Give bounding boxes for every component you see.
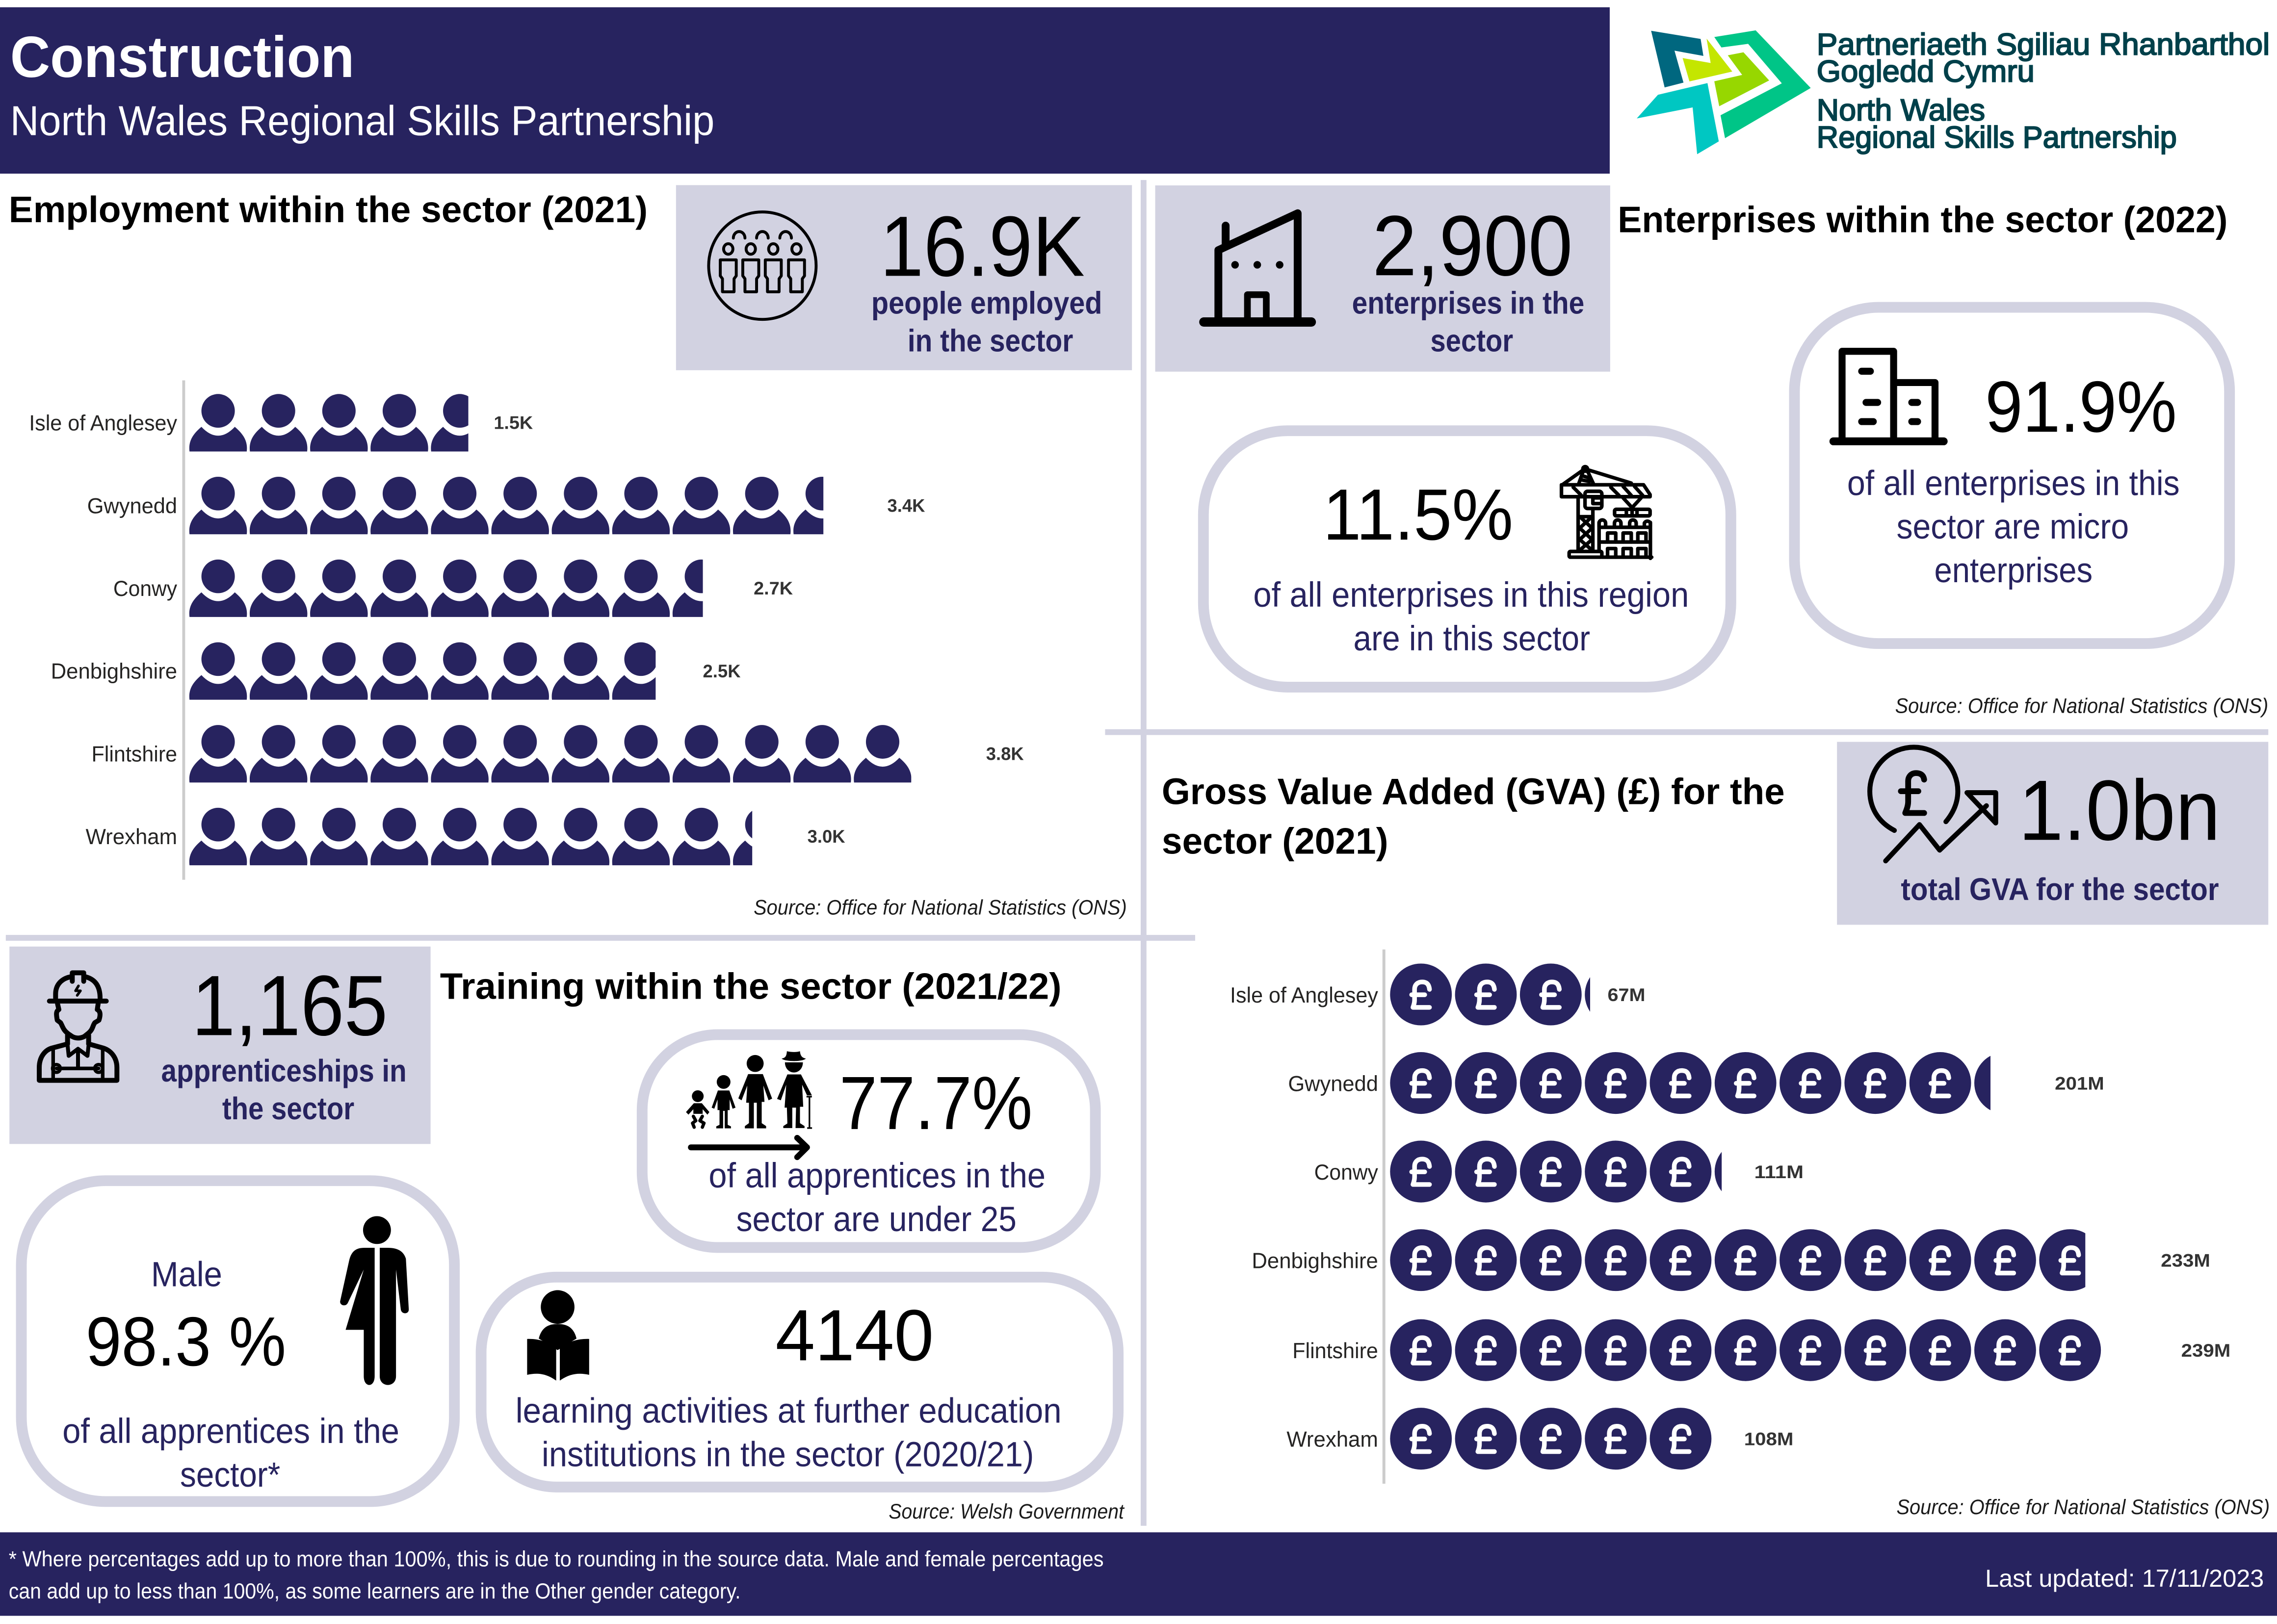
figure: 1,165: 1,165 [192,958,388,1054]
stat card: apprenticeships: the sector [222,1091,354,1126]
row: Conwy: 2.7K [754,578,793,598]
header banner [0,7,1610,174]
callout: micro enterprises: enterprises [1934,551,2093,590]
row: Conwy: Conwy [1314,1160,1379,1185]
icon: construction worker [39,973,117,1081]
figure: 1.0bn: 1.0bn [2018,763,2221,858]
callout: share of enterprises [1204,431,1731,687]
logo: North Wales [1817,94,1985,128]
footnote: can add up to less than 100%, as some learners are in the Other gender category. [9,1579,741,1603]
row: Flintshire: Flintshire [91,742,177,766]
stat card: people employed [676,185,1132,370]
row: Flintshire [1292,1319,2230,1381]
figure: 16.9K: 16.9K [880,199,1085,294]
stat card: enterprises [1155,185,1610,372]
heading: training: Training within the sector (2021/22) [440,965,1062,1006]
pictogram chart: GVA by county [1230,950,2230,1484]
stat card: people employed: in the sector [908,323,1073,358]
text: micro enterprises: of all enterprises in this [1847,464,2180,503]
row: Denbighshire [51,642,741,700]
footnote: * Where percentages add up to more than 100%, this is due to rounding in the source data. Male and female percentages [9,1547,1103,1572]
row: Denbighshire: Denbighshire [51,660,177,684]
row: Wrexham [1286,1408,1793,1469]
source: training: Source: Welsh Government [889,1500,1125,1523]
icon: gender figure [340,1216,409,1385]
callout: learning activities [481,1277,1118,1487]
row: Gwynedd [87,477,925,534]
row: Wrexham: Wrexham [1286,1427,1378,1451]
row: Isle of Anglesey: 1.5K [494,413,533,433]
icon: family ages with arrow [686,1051,812,1157]
row: Wrexham [86,808,845,865]
heading: GVA [1162,771,1785,861]
icon: crane and building [1562,466,1652,558]
row: Gwynedd: Gwynedd [1288,1072,1378,1096]
logo: Partneriaeth Sgiliau Rhanbarthol [1817,28,2270,62]
row: Conwy: 111M [1754,1162,1804,1182]
row: Flintshire: Flintshire [1292,1339,1378,1363]
row: Wrexham: 108M [1744,1429,1793,1449]
row: Denbighshire: 2.5K [703,661,741,681]
text: learning activities: learning activities at further education [516,1392,1062,1431]
stat card: total GVA [1837,742,2268,925]
panel: enterprises [1155,185,2268,718]
row: Gwynedd: 201M [2055,1073,2104,1093]
last updated: Last updated: 17/11/2023 [1985,1564,2264,1592]
figure: 91.9%: 91.9% [1985,366,2177,447]
callout: learning activities: institutions in the sector (2020/21) [542,1435,1034,1474]
heading: enterprises: Enterprises within the sector (2022) [1618,199,2227,240]
row: Flintshire [91,725,1024,782]
row: Denbighshire: Denbighshire [1252,1249,1378,1273]
text: male share: of all apprentices in the [62,1412,399,1451]
figure: 11.5%: 11.5% [1323,474,1513,555]
callout: under 25 [642,1034,1096,1247]
label: apprenticeships: apprenticeships in [161,1054,407,1088]
figure: 4140: 4140 [776,1295,934,1376]
heading: GVA: sector (2021) [1162,820,1388,861]
callout: micro enterprises: sector are micro [1897,508,2129,546]
footer banner [0,1532,2277,1616]
logo: Gogledd Cymru [1817,55,2035,89]
figure: 77.7%: 77.7% [839,1061,1032,1145]
row: Gwynedd: Gwynedd [87,494,177,518]
row: Conwy: Conwy [113,577,178,601]
callout: male share [22,1181,454,1501]
callout: share of enterprises: are in this sector [1354,619,1590,658]
stat card: enterprises: sector [1430,323,1513,358]
icon: people group [708,212,816,319]
label: people employed: people employed [871,285,1102,320]
callout: under 25: sector are under 25 [736,1200,1017,1239]
row: Denbighshire: 233M [2161,1250,2210,1270]
text: male: Male [151,1255,222,1294]
source: employment: Source: Office for National Statistics (ONS) [754,896,1127,920]
logo: Regional Skills Partnership [1817,121,2177,155]
icon: office buildings [1833,351,1944,441]
row: Conwy [113,560,793,617]
panel: gross value added [1162,742,2270,1519]
panel: training [9,947,1125,1523]
figure: 2,900: 2,900 [1372,198,1572,294]
row: Denbighshire [1252,1229,2210,1291]
row: Wrexham: Wrexham [86,825,177,849]
row: Conwy [1314,1141,1804,1203]
text: under 25: of all apprentices in the [708,1157,1046,1195]
icon: pound growth [1870,747,1996,861]
row: Gwynedd: 3.4K [887,495,925,516]
heading: GVA: Gross Value Added (GVA) (£) for the [1162,771,1785,812]
icon: building [1204,213,1311,322]
stat card: apprenticeships [9,947,431,1144]
logo [1637,28,2270,155]
row: Isle of Anglesey: 67M [1608,985,1645,1005]
title: Construction [10,25,354,90]
row: Isle of Anglesey: Isle of Anglesey [1230,983,1379,1007]
panel: employment [9,185,1132,920]
label: total GVA: total GVA for the sector [1901,872,2219,907]
callout: micro enterprises [1794,308,2229,644]
row: Gwynedd [1288,1052,2104,1114]
heading: employment: Employment within the sector (2021) [9,189,648,230]
row: Flintshire: 239M [2181,1340,2230,1361]
text: share of enterprises: of all enterprises in this region [1253,576,1689,615]
pictogram chart: employment by county [29,380,1024,880]
row: Isle of Anglesey: Isle of Anglesey [29,412,178,436]
row: Isle of Anglesey [29,394,533,452]
footnote [9,1547,1103,1603]
row: Wrexham: 3.0K [808,826,845,847]
row: Isle of Anglesey [1230,963,1647,1026]
figure: 98.3 %: 98.3 % [86,1303,286,1381]
icon: person reading [527,1290,589,1381]
callout: male share: sector* [180,1456,280,1495]
label: enterprises in the sector: enterprises in the [1352,285,1584,320]
subtitle: North Wales Regional Skills Partnership [10,97,714,144]
row: Flintshire: 3.8K [986,744,1024,764]
